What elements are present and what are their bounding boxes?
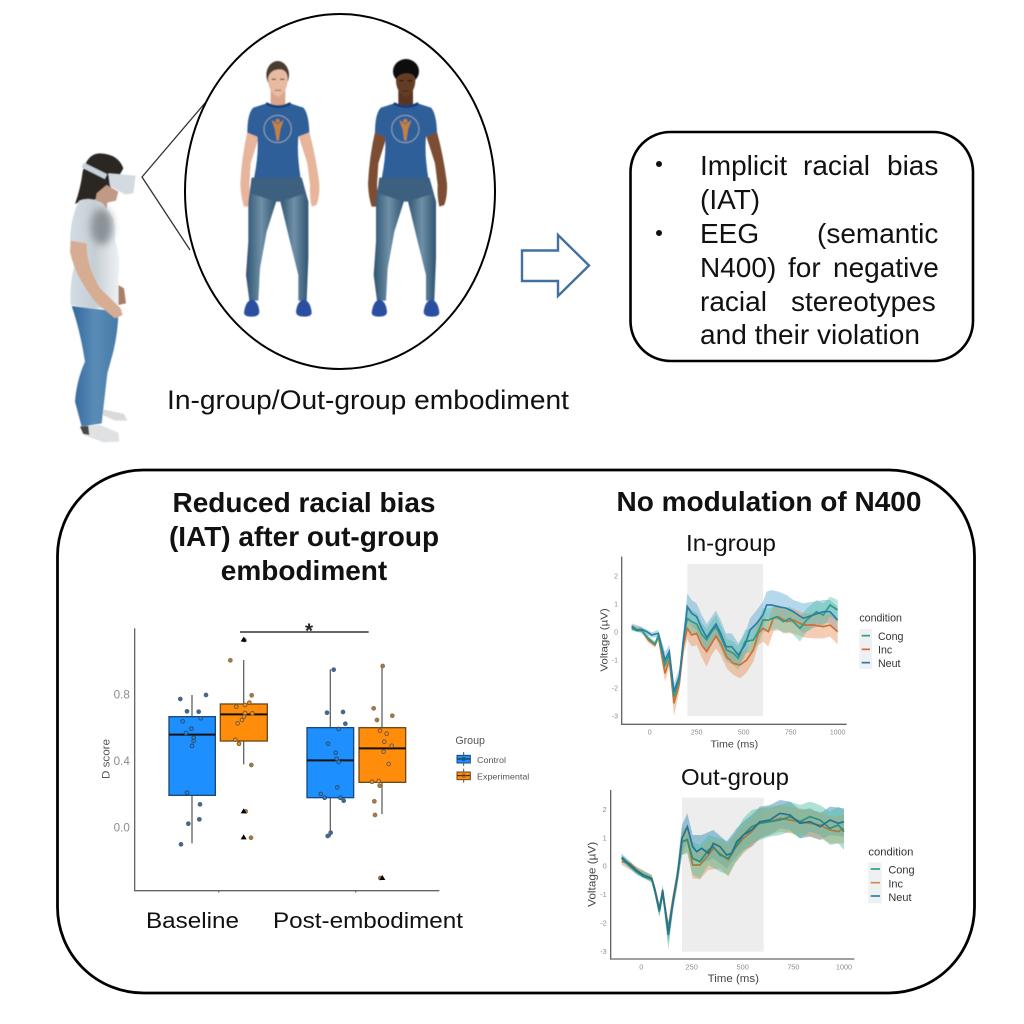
bubble: embodied avatars [185,14,495,369]
shirt [70,199,119,308]
measures list: racial [700,286,767,317]
jeans [72,306,118,427]
legend: condition: condition [868,847,913,859]
tick labels: 2 [603,805,607,814]
axis titles: Time (ms) [708,973,759,985]
measures list [656,150,939,350]
y axis labels: 0.0 [114,822,130,835]
control points outside boxes [178,668,347,846]
axis titles: Voltage (µV) [586,842,598,907]
avatar: out-group (dark skin) [368,59,447,317]
y axis labels [114,689,130,835]
measures list: (IAT) [700,184,760,215]
measures list: stereotypes [791,286,936,317]
legend: group: Group [455,735,485,747]
legend: condition [859,613,904,670]
box: control baseline [169,717,215,795]
ribbon: neutral [632,590,838,700]
neck and face [95,185,118,210]
chart title: in-group: In-group [686,530,776,556]
measures list: N400) [700,252,776,283]
axis titles [600,608,758,750]
tick labels: 1 [603,833,607,842]
significance bar [240,630,369,634]
ribbon: neutral [622,800,844,943]
axis titles: Time (ms) [710,739,758,750]
tick labels: 500 [737,963,749,972]
heading: reduced racial bias: Reduced racial bias [172,487,436,518]
analysis window [687,564,763,716]
shirt shadow [91,208,112,245]
illustration: person wearing VR headset [70,153,136,442]
tick labels: 0 [648,730,652,737]
line: incongruent [632,617,838,703]
legend: condition: Neut [888,892,912,904]
y axis labels: 0.4 [114,755,130,768]
panel: measures [630,132,973,361]
measures list: Implicit [700,150,787,181]
legend: group: Experimental [477,772,529,782]
tick labels: 750 [785,730,797,737]
heading: reduced racial bias: embodiment [221,555,387,586]
axes [135,628,439,892]
line: incongruent [622,818,844,928]
line: congruent [622,817,844,930]
tick labels: 750 [787,963,799,972]
box: experimental post [359,728,406,782]
back shoe [103,409,127,421]
heel [80,426,89,435]
legend: condition: Cong [878,631,904,643]
headset [108,173,136,194]
tick labels [612,573,846,737]
line: congruent [632,605,838,697]
legend: condition: Inc [878,644,893,656]
legend: group: Control [477,755,506,765]
box: control post [307,728,354,798]
measures box outline [630,132,973,361]
line: neutral [632,605,838,692]
legend: condition: condition [859,613,902,625]
chart: in-group ERP [600,557,904,750]
whiskers [192,660,382,843]
legend: condition: Cong [888,865,915,877]
measures list: negative [833,252,939,283]
y axis labels: 0.8 [114,689,130,702]
x axis label: post-embodiment: Post-embodiment [273,908,464,933]
chart: out-group ERP [586,790,915,985]
outlier markers [241,637,385,880]
experimental points inside boxes [233,701,393,783]
analysis window [682,798,764,952]
bubble outline [185,14,495,369]
avatar: in-group (light skin) [240,61,319,317]
heading: no modulation of N400: No modulation of N400 [617,486,921,517]
measures list: for [788,252,821,283]
front shoe [80,425,119,442]
headset strap [83,165,106,177]
tick labels: 0 [639,963,643,972]
tick labels: 2 [614,573,618,580]
ribbon: incongruent [622,805,844,940]
axes [622,557,847,724]
legend: condition: Neut [878,658,901,670]
legend: group [455,735,529,783]
tick labels [600,805,852,972]
zoom lines from headset to bubble [142,103,205,250]
caption: in-group / out-group embodiment: In-group/Out-group embodiment [167,385,570,415]
arm [70,241,123,318]
medians [169,714,406,760]
measures list: (semantic [817,218,938,249]
tick labels: 1000 [830,730,846,737]
measures list: racial [803,150,870,181]
ribbon: incongruent [632,605,838,716]
axes [611,790,854,959]
box: experimental baseline [220,704,267,741]
control points inside boxes [181,716,342,799]
back hand [118,285,126,305]
tick labels: 1000 [836,963,852,972]
tick labels: -3 [600,947,607,956]
x axis label: baseline: Baseline [146,908,239,933]
axis titles: Voltage (µV) [600,608,611,672]
heading: reduced racial bias: (IAT) after out-group [169,521,439,552]
significance star: * [305,619,314,642]
measures list: EEG [700,218,759,249]
hair [75,153,123,204]
arrow [522,235,589,296]
legend: condition: Inc [888,878,903,890]
tick labels: -1 [600,890,607,899]
ribbon: congruent [632,597,838,705]
measures list: and their violation [700,319,920,350]
experimental points outside boxes [228,638,394,880]
chart: D score box plot [100,619,529,892]
heading: reduced racial bias [169,487,439,586]
tick labels: 0 [614,629,618,636]
chart title: out-group: Out-group [681,764,789,790]
tick labels: -1 [612,658,618,665]
tick labels: 500 [738,730,750,737]
tick labels: 0 [603,862,607,871]
y axis title: D score [100,739,112,779]
legend: condition [868,847,915,904]
tick labels: 1 [614,601,618,608]
tick labels: 250 [686,963,698,972]
tick labels: -2 [600,919,607,928]
axis titles [586,842,759,985]
panel: results [58,470,974,993]
ribbon: congruent [622,802,844,950]
tick labels: -2 [612,686,618,693]
tick labels: -3 [612,714,618,721]
line: neutral [622,813,844,935]
tick labels: 250 [691,730,703,737]
measures list: bias [887,150,938,181]
